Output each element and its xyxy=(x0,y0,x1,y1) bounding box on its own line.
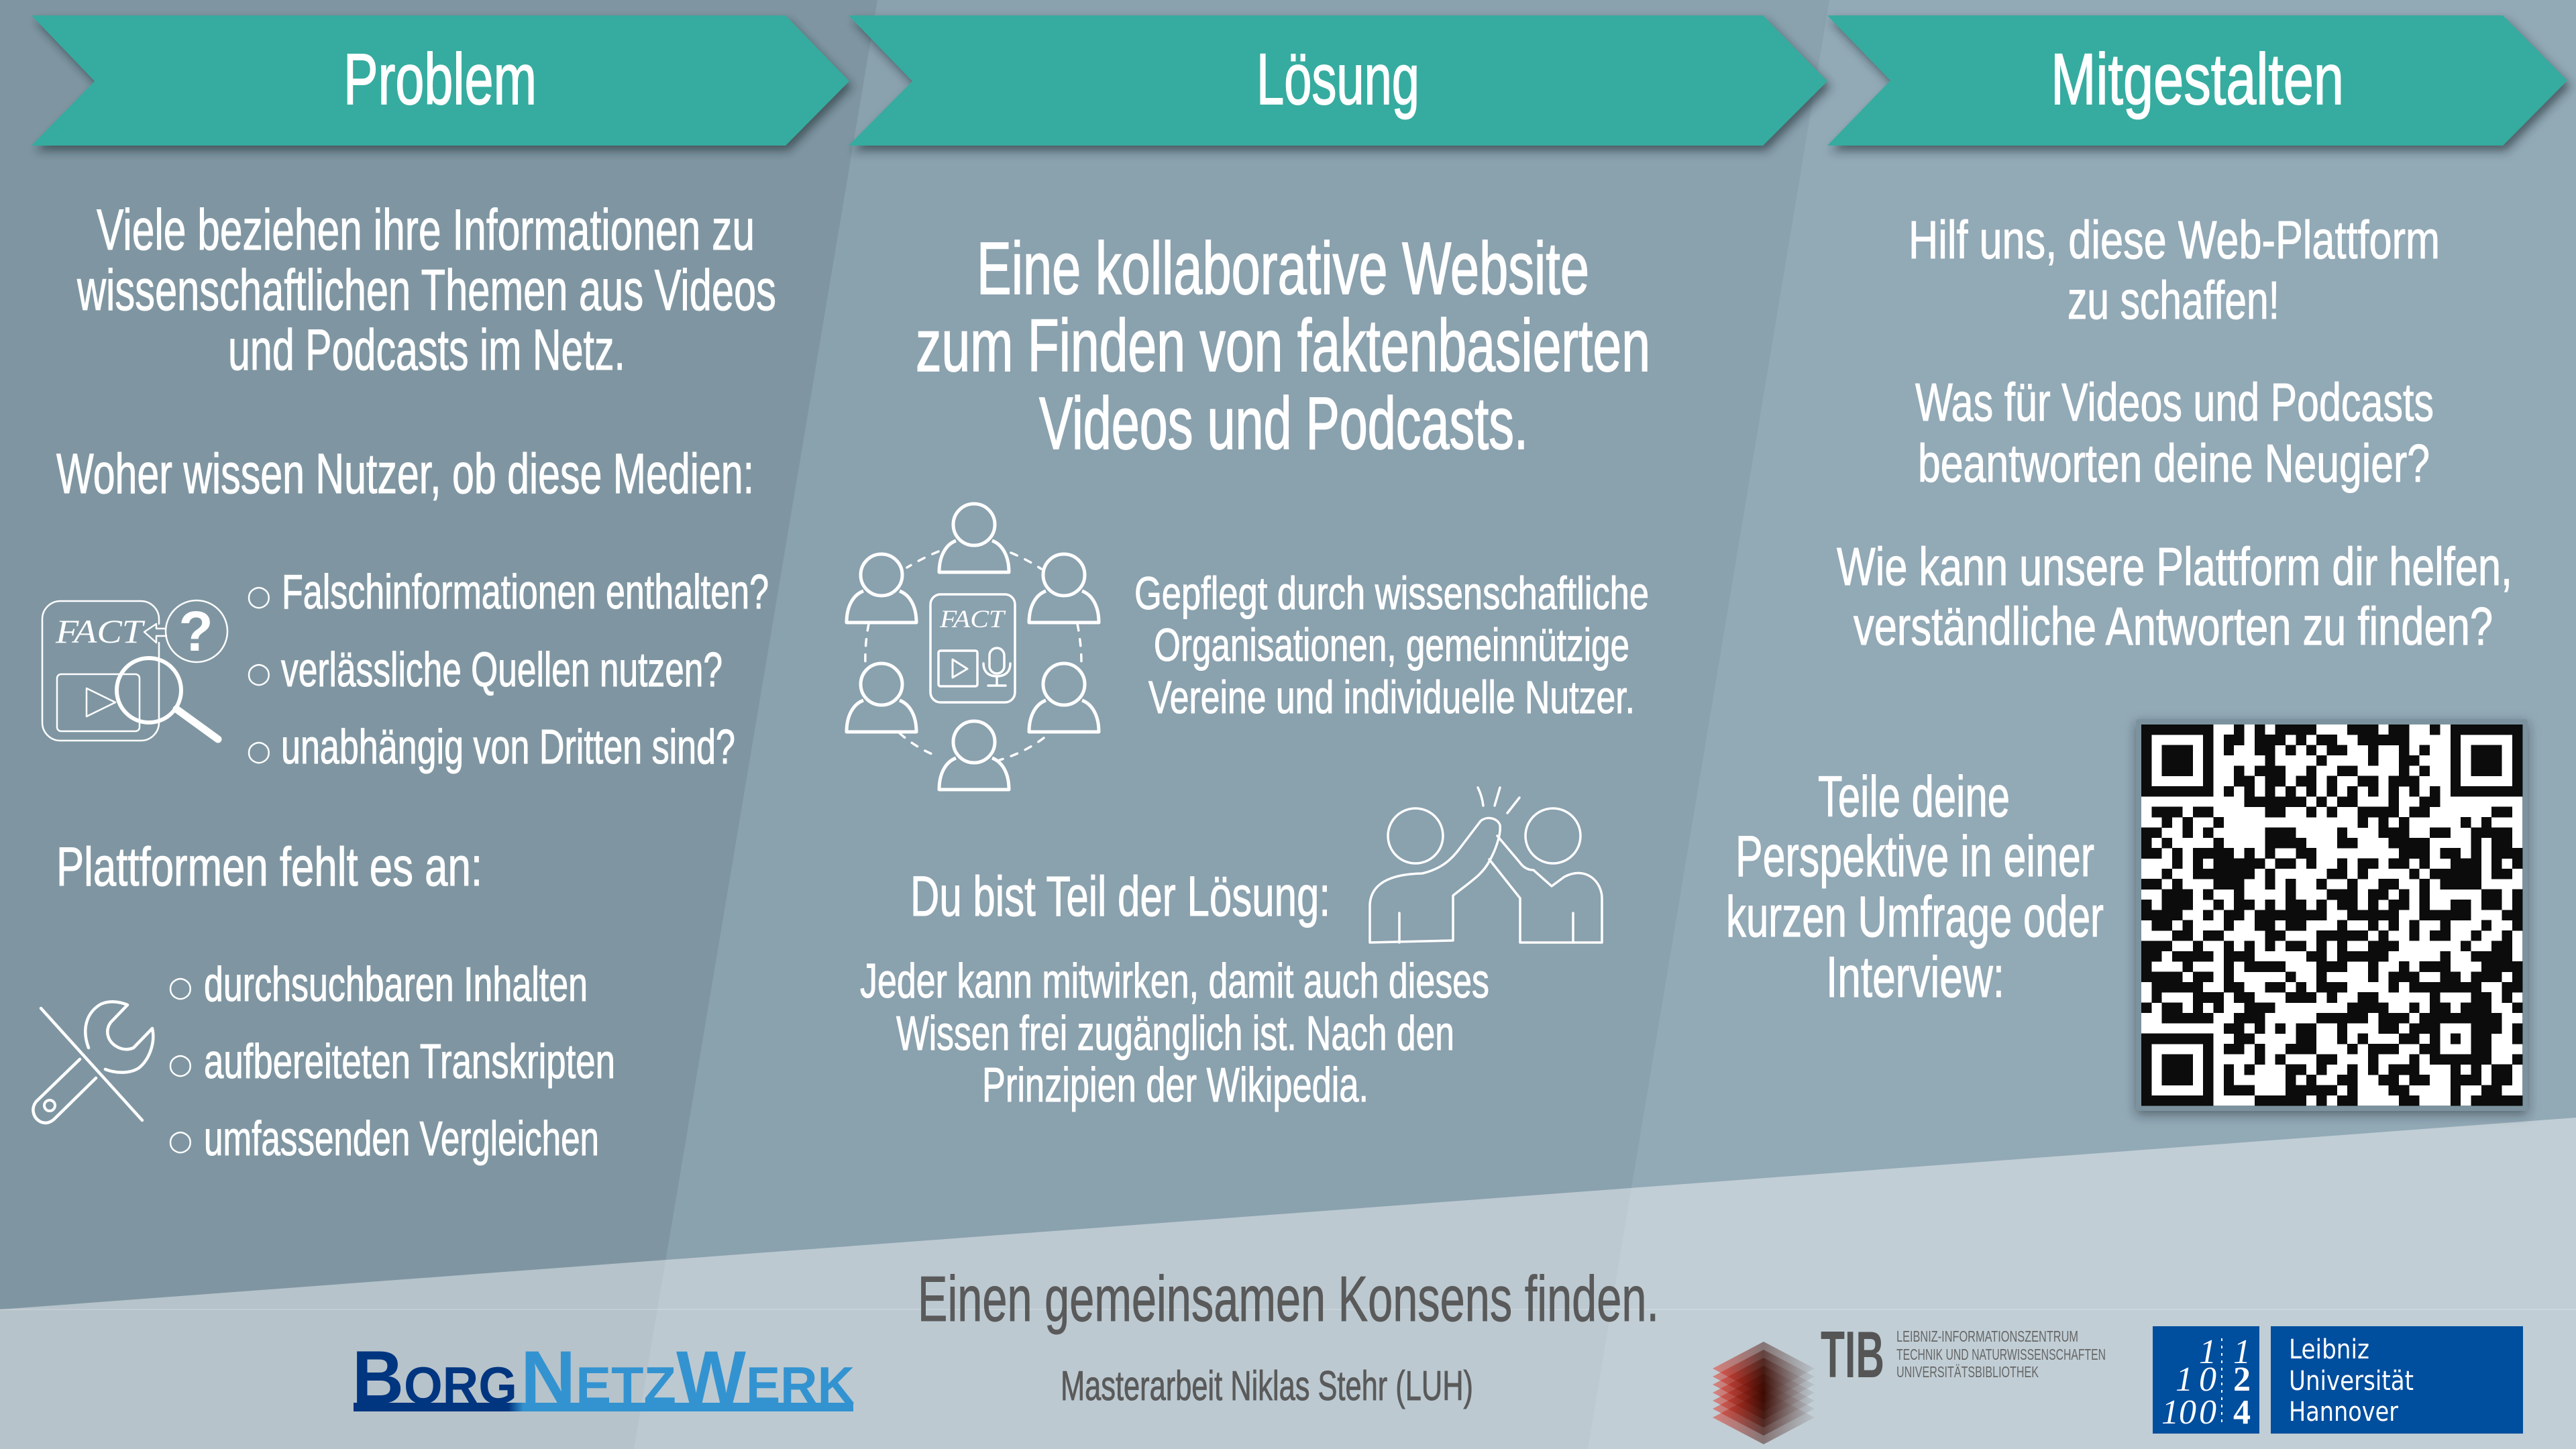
text block: maintained by: Vereine und individuelle Nutzer. xyxy=(1148,672,1635,723)
list: missing features: ○ xyxy=(168,1124,193,1157)
logo: BorgNetzWerk xyxy=(352,1336,855,1419)
logo: Leibniz Universität Hannover: Universität xyxy=(2289,1366,2414,1397)
logo: BorgNetzWerk: Netz xyxy=(521,1336,676,1419)
icon: tools crossed xyxy=(33,1002,153,1123)
logo: Leibniz Universität Hannover: 4 xyxy=(2233,1393,2251,1432)
text block: solution headline: Videos und Podcasts. xyxy=(1039,382,1528,465)
text block: maintained by xyxy=(1134,568,1649,723)
icon: high five xyxy=(1370,788,1602,943)
logo: Leibniz Universität Hannover: 1 xyxy=(2176,1360,2193,1399)
logo: TIB: TECHNIK UND NATURWISSENSCHAFTEN xyxy=(1896,1346,2106,1363)
text block: everyone can contribute xyxy=(860,955,1489,1112)
text block: help us: zu schaffen! xyxy=(2068,270,2279,330)
list: media questions: unabhängig von Dritten sind? xyxy=(281,720,735,774)
icon: community around fact card xyxy=(847,504,1099,790)
text block: problem intro: Viele beziehen ihre Informationen zu xyxy=(97,198,755,262)
background: bottom band xyxy=(0,1118,2576,1449)
logo: TIB: LEIBNIZ-INFORMATIONSZENTRUM xyxy=(1896,1328,2078,1345)
text block: share your perspective: Perspektive in einer xyxy=(1735,824,2094,889)
text block: share your perspective: Teile deine xyxy=(1818,765,2010,829)
text block: solution headline: zum Finden von faktenbasierten xyxy=(916,305,1650,387)
list: media questions: verlässliche Quellen nutzen? xyxy=(281,643,722,697)
logo: TIB: UNIVERSITÄTSBIBLIOTHEK xyxy=(1896,1363,2039,1381)
tagline: Einen gemeinsamen Konsens finden: Einen gemeinsamen Konsens finden. xyxy=(918,1263,1659,1335)
text block: solution headline xyxy=(916,227,1650,465)
text block: share your perspective xyxy=(1726,765,2104,1010)
qr code xyxy=(2136,719,2528,1111)
list: missing features: ○ xyxy=(168,1047,193,1080)
list: media questions: Falschinformationen enthalten? xyxy=(282,566,769,619)
logo: TIB xyxy=(1713,1318,2106,1444)
text block: everyone can contribute: Prinzipien der Wikipedia. xyxy=(982,1059,1368,1112)
text block: platform question xyxy=(1837,537,2512,656)
heading: Mitgestalten: Mitgestalten xyxy=(2051,38,2344,119)
logo: TIB: TIB xyxy=(1821,1318,1884,1391)
logo: Leibniz Universität Hannover: 1 xyxy=(2161,1393,2179,1432)
logo: Leibniz Universität Hannover: 1 xyxy=(2233,1333,2251,1371)
heading: Woher wissen Nutzer: Woher wissen Nutzer, ob diese Medien: xyxy=(56,442,754,505)
heading: Problem: Problem xyxy=(343,38,537,119)
icon: fact check with magnifier: ? xyxy=(178,600,213,663)
logo: Leibniz Universität Hannover: 0 xyxy=(2199,1393,2216,1432)
text block: maintained by: Gepflegt durch wissenschaftliche xyxy=(1134,568,1649,619)
text block: everyone can contribute: Jeder kann mitwirken, damit auch dieses xyxy=(860,955,1489,1008)
list: missing features xyxy=(168,958,615,1166)
heading: Du bist Teil der Lösung: Du bist Teil der Lösung: xyxy=(910,865,1330,928)
background: right panel xyxy=(1588,0,2576,1449)
logo: Leibniz Universität Hannover xyxy=(2153,1326,2523,1434)
arrow banner: Mitgestalten xyxy=(1827,15,2567,146)
text block: help us xyxy=(1909,210,2440,330)
list: missing features: aufbereiteten Transkripten xyxy=(204,1035,615,1089)
arrow banner: Lösung xyxy=(849,15,1827,146)
logo: Leibniz Universität Hannover: Hannover xyxy=(2289,1397,2398,1428)
logo: Leibniz Universität Hannover: 2 xyxy=(2233,1360,2251,1399)
logo: Leibniz Universität Hannover: Leibniz xyxy=(2289,1334,2369,1365)
text block: problem intro: wissenschaftlichen Themen aus Videos xyxy=(76,258,776,323)
text block: curiosity question xyxy=(1915,372,2434,493)
heading: Plattformen fehlt es an: Plattformen fehlt es an: xyxy=(56,837,482,898)
background: middle panel xyxy=(634,0,2576,1449)
text block: share your perspective: Interview: xyxy=(1826,945,2004,1010)
list: missing features: durchsuchbaren Inhalten xyxy=(204,958,588,1012)
list: missing features: umfassenden Vergleichen xyxy=(204,1112,599,1166)
list: media questions: ○ xyxy=(247,579,271,612)
icon: fact check with magnifier xyxy=(42,600,227,741)
icon: fact check with magnifier: FACT xyxy=(55,612,146,650)
text block: share your perspective: kurzen Umfrage oder xyxy=(1726,885,2104,949)
logo: Leibniz Universität Hannover: 0 xyxy=(2199,1360,2216,1399)
icon: community around fact card: FACT xyxy=(939,606,1006,633)
list: missing features: ○ xyxy=(168,970,193,1003)
heading: Lösung: Lösung xyxy=(1256,38,1419,119)
list: media questions: ○ xyxy=(247,656,271,689)
logo: Leibniz Universität Hannover: 1 xyxy=(2199,1333,2216,1371)
text block: solution headline: Eine kollaborative Website xyxy=(977,227,1589,310)
text block: maintained by: Organisationen, gemeinnützige xyxy=(1154,619,1629,671)
list: media questions: ○ xyxy=(247,734,271,767)
arrow banner: Problem xyxy=(32,15,849,146)
text block: problem intro xyxy=(76,198,776,382)
text block: curiosity question: beantworten deine Neugier? xyxy=(1918,433,2430,493)
text block: problem intro: und Podcasts im Netz. xyxy=(228,318,625,382)
list: media questions xyxy=(247,566,769,774)
credit: Masterarbeit: Masterarbeit Niklas Stehr (LUH) xyxy=(1061,1363,1473,1409)
logo: BorgNetzWerk: Werk xyxy=(676,1336,855,1419)
text block: everyone can contribute: Wissen frei zugänglich ist. Nach den xyxy=(896,1007,1454,1061)
logo: BorgNetzWerk: Borg xyxy=(352,1336,517,1419)
logo: Leibniz Universität Hannover: 0 xyxy=(2179,1393,2196,1432)
